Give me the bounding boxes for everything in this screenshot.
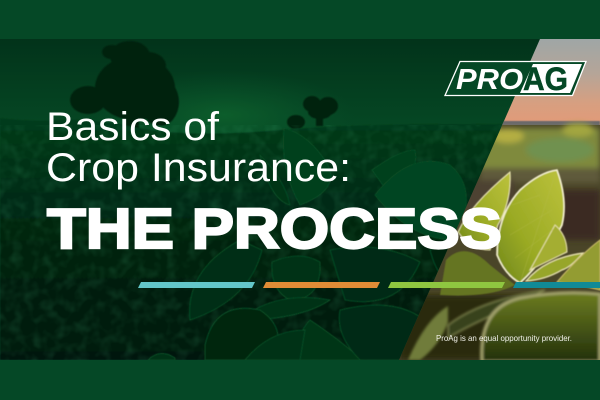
field	[0, 118, 540, 360]
heading: Basics of Crop Insurance: Basics of	[46, 105, 220, 149]
bottom band	[0, 360, 600, 400]
top band	[0, 0, 600, 39]
icon: blurred foreground leaves	[408, 290, 600, 362]
panel: sunset crop photo	[399, 39, 600, 362]
heading: THE PROCESS: THE PROCESS	[47, 197, 502, 261]
icon: small tree silhouette	[287, 96, 338, 129]
logo: ProAg: PRO	[456, 64, 523, 96]
heading: Basics of Crop Insurance: Crop Insurance:	[46, 146, 351, 190]
heading: Basics of Crop Insurance	[46, 105, 351, 190]
green leaves overlay	[148, 128, 490, 360]
disclaimer text: ProAg is an equal opportunity provider.	[436, 333, 572, 343]
icon: large tree silhouette	[70, 41, 180, 128]
logo: ProAg	[445, 61, 586, 97]
divider bars	[138, 282, 600, 288]
logo: ProAg: AG	[523, 61, 568, 97]
icon: sunlit soybean leaves	[440, 170, 600, 296]
